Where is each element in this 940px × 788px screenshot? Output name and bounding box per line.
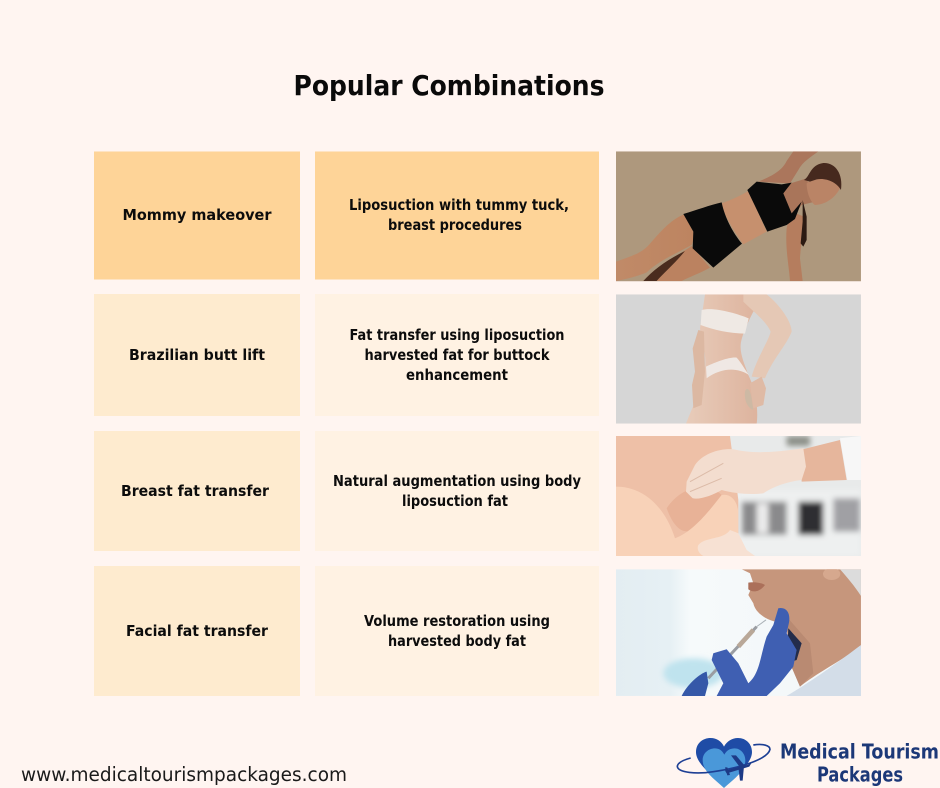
description cell: Breast fat transfer <box>315 431 599 551</box>
label cell: Brazilian butt lift <box>94 294 300 416</box>
description cell: Brazilian butt lift <box>315 294 599 416</box>
photo: woman in side plank <box>616 151 861 281</box>
description cell: Breast fat transfer: liposuction fat <box>402 492 508 510</box>
head <box>807 179 841 205</box>
description cell: Brazilian butt lift: enhancement <box>406 366 509 384</box>
row: Brazilian butt lift <box>94 294 599 416</box>
back glove <box>712 608 797 696</box>
front finger <box>682 672 708 696</box>
label cell: Breast fat transfer: Breast fat transfer <box>121 482 269 500</box>
skin <box>616 436 738 538</box>
supporting arm <box>786 213 804 281</box>
row: Mommy makeover <box>94 152 599 280</box>
bra cup <box>616 487 738 556</box>
row: Breast fat transfer <box>94 431 599 551</box>
label cell: Mommy makeover: Mommy makeover <box>122 206 272 224</box>
hand and brush <box>745 389 753 410</box>
ear <box>823 568 840 580</box>
bandeau top <box>701 309 749 334</box>
photo: woman in white underwear with dry brush <box>616 294 861 424</box>
description cell: Breast fat transfer: Natural augmentation using body <box>333 472 581 490</box>
front leg <box>616 214 695 281</box>
logo: Packages <box>817 763 903 787</box>
logo <box>677 738 939 788</box>
description cell: Brazilian butt lift: Fat transfer using liposuction <box>350 326 564 344</box>
torso and hip <box>686 294 758 424</box>
label cell: Brazilian butt lift: Brazilian butt lift <box>129 346 266 364</box>
neck shadow <box>787 617 813 687</box>
photo: injection into neck with blue gloves <box>616 568 861 696</box>
torso <box>722 191 767 244</box>
blurred shelves <box>739 436 861 538</box>
icon: airplane <box>725 755 752 781</box>
back leg <box>657 246 710 281</box>
hair cap <box>840 569 861 596</box>
description cell: Facial fat transfer <box>315 566 599 696</box>
row: Facial fat transfer <box>94 566 599 696</box>
lower glove <box>698 530 755 556</box>
cleavage shadow <box>667 487 722 531</box>
shadow behind glove <box>788 628 802 661</box>
label cell: Breast fat transfer <box>94 431 300 551</box>
photo: gloved hands examining breast implant area <box>616 436 861 557</box>
title: Popular Combinations <box>294 70 604 102</box>
underwear <box>706 358 749 378</box>
ponytail <box>801 200 807 247</box>
icon: orbit ring <box>677 744 770 773</box>
shirt <box>787 645 861 696</box>
description cell: Mommy makeover <box>315 152 599 280</box>
sleeve and forearm <box>800 440 847 482</box>
raised arm <box>758 151 818 183</box>
description cell: Facial fat transfer: harvested body fat <box>388 632 526 650</box>
upper glove <box>686 448 806 499</box>
face and neck <box>742 569 861 687</box>
neck and chest <box>784 178 812 214</box>
near arm <box>743 294 792 378</box>
label cell: Mommy makeover <box>94 152 300 280</box>
website url: www.medicaltourismpackages.com <box>21 763 347 786</box>
lips <box>748 582 765 591</box>
description cell: Mommy makeover: breast procedures <box>388 216 522 234</box>
label cell: Facial fat transfer: Facial fat transfer <box>126 622 268 640</box>
shorts <box>683 202 742 268</box>
description cell: Mommy makeover: Liposuction with tummy tuck, <box>349 196 569 214</box>
label cell: Facial fat transfer <box>94 566 300 696</box>
syringe <box>708 627 757 678</box>
icon: heart <box>696 738 752 788</box>
hair <box>804 163 841 190</box>
description cell: Facial fat transfer: Volume restoration using <box>364 612 550 630</box>
far arm <box>692 330 705 408</box>
sports bra <box>747 182 802 232</box>
description cell: Brazilian butt lift: harvested fat for buttock <box>364 346 550 364</box>
